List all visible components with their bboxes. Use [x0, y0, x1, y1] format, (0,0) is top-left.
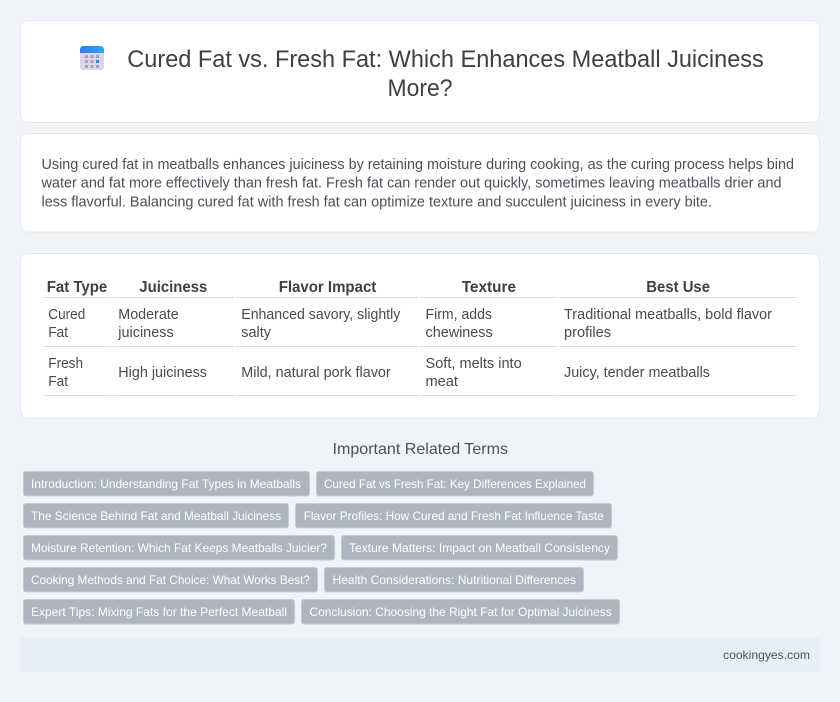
table header row: Flavor Impact: [279, 279, 377, 296]
text block: summary: water and fat more effectively than fresh fat. Fresh fat can render out quickly, sometimes leaving meatballs drier and: [40, 176, 782, 192]
tag row 3: Texture Matters: Impact on Meatball Consistency: [349, 541, 610, 555]
tag row 5: Conclusion: Choosing the Right Fat for Optimal Juiciness: [310, 605, 612, 619]
table row: fresh fat: High juiciness: [118, 365, 207, 381]
text block: summary: Using cured fat in meatballs enhances juiciness by retaining moisture during cooking, as the curing process helps bind: [42, 157, 794, 173]
text block: summary: [40, 157, 794, 210]
tag row 5: [24, 600, 620, 624]
table row: cured fat: [43, 307, 797, 347]
table row: fresh fat: [43, 356, 797, 396]
title: More?: [388, 75, 452, 102]
icon: calendar: [80, 46, 104, 70]
tag row 2: Flavor Profiles: How Cured and Fresh Fat Influence Taste: [304, 509, 604, 523]
table header row: Best Use: [646, 279, 710, 296]
heading: important related terms: Important Related Terms: [332, 441, 508, 458]
tag row 4: [24, 568, 584, 592]
panel: comparison table: [20, 254, 820, 418]
table row: cured fat: Moderate: [118, 307, 179, 323]
tag row 3: [24, 536, 618, 560]
table row: cured fat: juiciness: [117, 325, 174, 341]
table header row: Fat Type: [47, 279, 107, 296]
table row: cured fat: Firm, adds: [426, 307, 492, 323]
table row: cured fat: Fat: [48, 325, 68, 341]
tag row 5: Expert Tips: Mixing Fats for the Perfect Meatball: [31, 605, 287, 619]
panel: related term tags: [24, 472, 620, 624]
table row: fresh fat: Mild, natural pork flavor: [241, 365, 391, 381]
footer: [20, 638, 820, 672]
table row: cured fat: Cured: [48, 307, 85, 323]
tag row 4: Cooking Methods and Fat Choice: What Works Best?: [31, 573, 310, 587]
tag row 3: Moisture Retention: Which Fat Keeps Meatballs Juicier?: [31, 541, 327, 555]
tag row 1: Introduction: Understanding Fat Types in Meatballs: [31, 477, 301, 491]
table row: fresh fat: Soft, melts into: [426, 356, 522, 372]
tag row 4: Health Considerations: Nutritional Differences: [332, 573, 576, 587]
tag row 2: The Science Behind Fat and Meatball Juiciness: [31, 509, 281, 523]
table row: fresh fat: Fresh: [48, 356, 83, 372]
table row: cured fat: salty: [241, 325, 272, 341]
table row: fresh fat: meat: [426, 374, 458, 390]
tag row 1: [24, 472, 594, 496]
table row: cured fat: Traditional meatballs, bold flavor: [564, 307, 772, 323]
table row: fresh fat: Fat: [48, 374, 68, 390]
title: Cured Fat vs. Fresh Fat: Which Enhances Meatball Juiciness: [127, 46, 764, 73]
panel: summary paragraph: [20, 134, 820, 232]
table header row: Juiciness: [139, 279, 207, 296]
table row: cured fat: chewiness: [426, 325, 493, 341]
table header row: Texture: [462, 279, 516, 296]
table header row: [43, 279, 797, 298]
table row: cured fat: Enhanced savory, slightly: [241, 307, 401, 323]
table row: fresh fat: Juicy, tender meatballs: [564, 365, 710, 381]
text block: summary: less flavorful. Balancing cured fat with fresh fat can optimize texture and succulent juiciness in every bite.: [42, 194, 712, 210]
title: [127, 46, 764, 102]
panel: title header: [20, 20, 820, 122]
tag row 2: [24, 504, 612, 528]
footer source text: cookingyes.com: [723, 648, 810, 662]
tag row 1: Cured Fat vs Fresh Fat: Key Differences Explained: [324, 477, 586, 491]
table row: cured fat: profiles: [564, 325, 611, 341]
